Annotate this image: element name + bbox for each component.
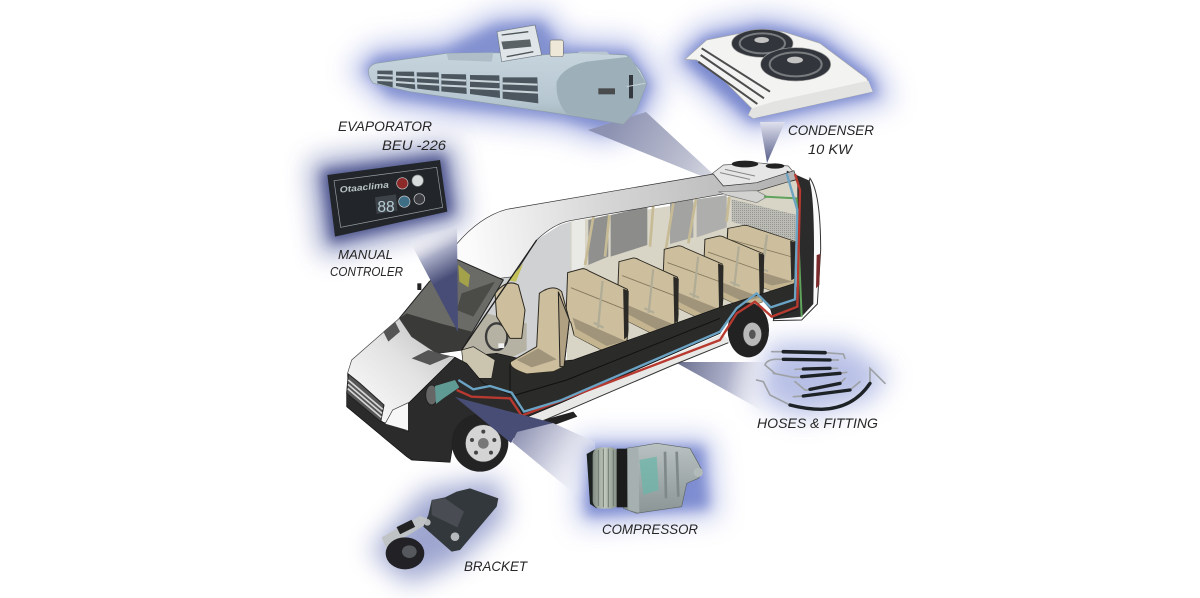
hood (347, 283, 455, 424)
roof shell (457, 171, 797, 278)
controller display: 88 (377, 199, 395, 216)
grille (347, 374, 384, 422)
small compressor in engine bay (426, 380, 459, 405)
label: 10 KW: 10 KW (808, 141, 854, 157)
front fender and bumper (347, 357, 524, 462)
arrow: hoses beam (675, 362, 772, 416)
arrow: condenser beam (760, 122, 785, 163)
evaporator on van ceiling (718, 191, 767, 203)
component: manual controller panel (327, 160, 447, 237)
arrow: evaporator beam (588, 112, 726, 186)
arrow: manual controller beam (408, 228, 458, 332)
component: hoses and fittings (757, 352, 885, 409)
component: evaporator unit (368, 25, 647, 124)
controller logo: Otaaclima (339, 180, 389, 195)
side sill and step (525, 334, 732, 425)
rear wheel (728, 303, 769, 357)
component: condenser unit (685, 29, 873, 118)
windshield and cab glass (399, 240, 537, 353)
interior cabin walls (462, 180, 797, 363)
rear wall and white rear corner (773, 171, 821, 321)
headlight (385, 403, 408, 431)
front wheel (452, 414, 508, 472)
steering wheel and dash (462, 323, 507, 378)
label: condenser: CONDENSER (788, 122, 874, 138)
label: model BEU-226: BEU -226 (382, 137, 446, 153)
passenger seats, rear to front (566, 225, 796, 353)
refrigerant pipes: red, blue, green (457, 173, 802, 416)
panel: soft blue halos behind the components (327, 25, 880, 572)
label: bracket: BRACKET (464, 558, 528, 574)
driver seat (510, 288, 569, 374)
label: evaporator: EVAPORATOR (338, 118, 432, 134)
label: compressor: COMPRESSOR (602, 521, 698, 537)
passenger seat (495, 283, 525, 338)
rooftop condenser on van (712, 161, 794, 186)
label: manual: MANUAL (338, 247, 393, 262)
label: hoses and fitting: HOSES & FITTING (757, 415, 878, 431)
label: controler: CONTROLER (330, 264, 403, 279)
component: bracket with tensioner pulley (382, 488, 498, 569)
illustration: cutaway van (347, 161, 821, 472)
floor and lower body panel (463, 283, 797, 418)
component: compressor (587, 443, 703, 513)
arrow: compressor beam (455, 397, 598, 512)
